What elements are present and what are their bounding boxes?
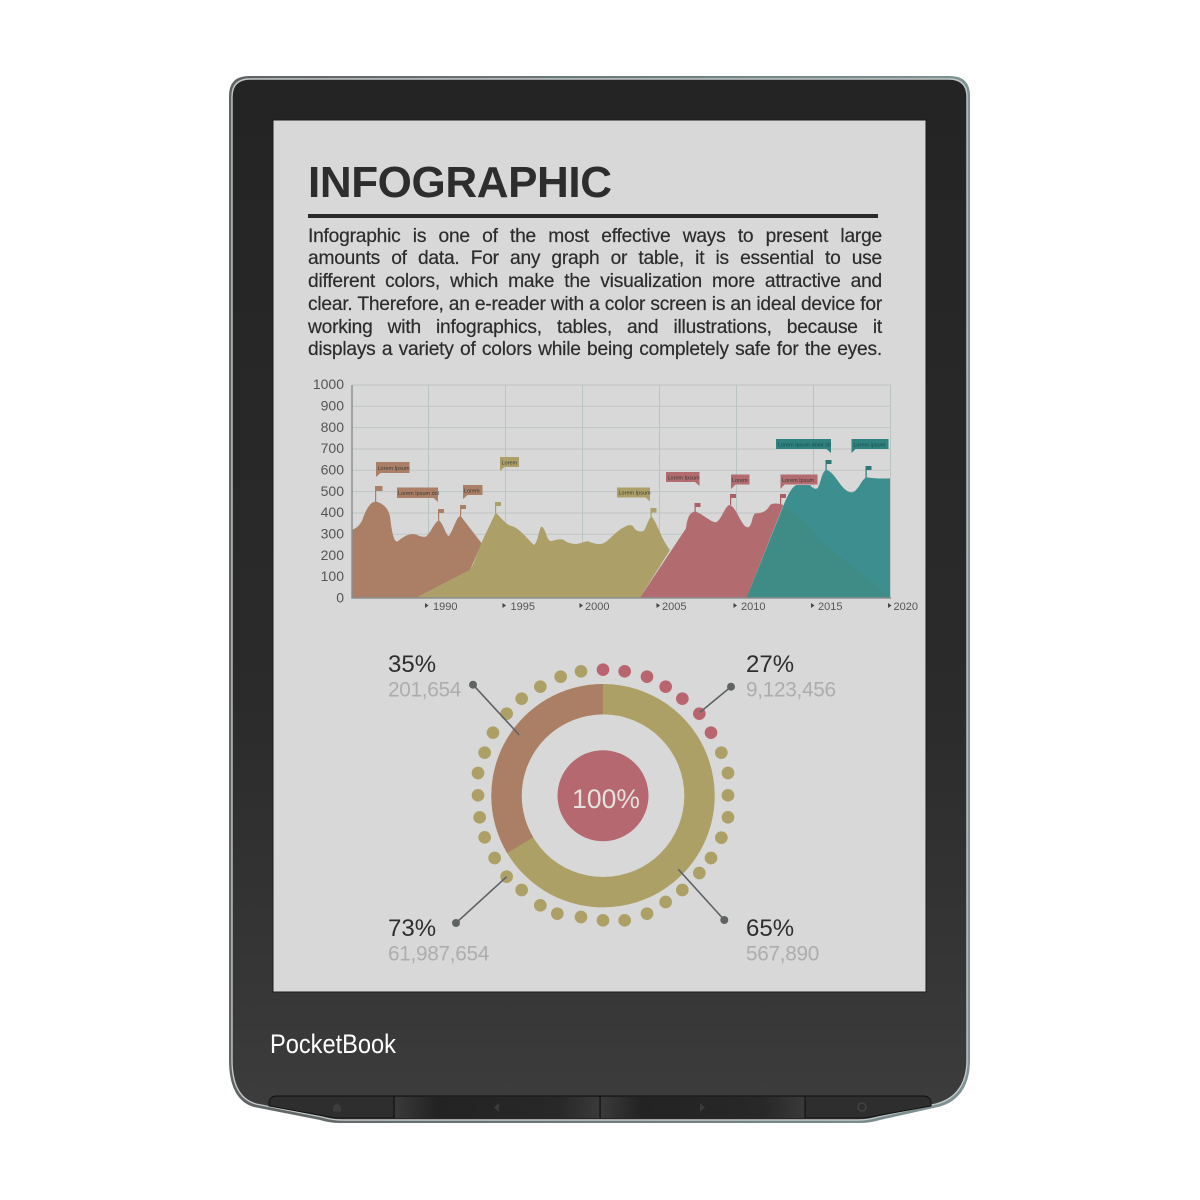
callout: brown 3 [463, 485, 482, 499]
callout: red 3: Lorem Ipsum [782, 478, 815, 484]
callout: brown 2: Lorem Ipsum dol [398, 491, 439, 497]
y axis labels: 0 [336, 590, 344, 606]
center circle [558, 750, 648, 841]
title rule [308, 214, 878, 218]
callout: olive 1: Lorem [502, 460, 518, 466]
donut ring: olive [506, 699, 700, 892]
y axis labels: 1000 [313, 376, 344, 392]
intro paragraph: working with infographics, tables, and illustrations, because it [308, 317, 882, 338]
callout: teal 1: Lorem Ipsum dolor sit [778, 442, 831, 448]
intro paragraph: different colors, which make the visualization more attractive and [308, 271, 882, 292]
device outer rim [229, 76, 970, 1123]
intro paragraph: Infographic is one of the most effective ways to present large [308, 226, 882, 246]
button bar [269, 1096, 931, 1118]
y axis labels: 100 [321, 568, 344, 584]
callout: brown 1 [376, 462, 410, 477]
stat: 73%: 73% [388, 915, 436, 942]
callout: teal 2 [852, 439, 888, 453]
stat: 35%: 35% [388, 651, 436, 678]
stat: 65% [746, 915, 819, 966]
leader: bottom left [452, 877, 507, 927]
stat: 73%: 61,987,654 [388, 942, 489, 966]
callout: red 1: Lorem Ipsum [668, 476, 700, 482]
callout: red 3 [780, 474, 818, 489]
area: olive series [417, 513, 670, 598]
leader lines [452, 681, 735, 927]
center label: 100% [572, 784, 640, 814]
y axis labels: 800 [321, 419, 344, 435]
stat: 65%: 567,890 [746, 942, 819, 966]
stat: 35%: 201,654 [388, 678, 461, 702]
brand logo: PocketBook [270, 1029, 396, 1059]
callout: teal 1 [776, 439, 831, 453]
x axis labels: 2020 [894, 601, 918, 613]
stat: 73% [388, 915, 489, 966]
y axis labels: 700 [321, 440, 344, 456]
leader: top left [469, 681, 519, 735]
x axis labels: 2010 [741, 601, 765, 613]
callout: brown 1: Lorem Ipsum [378, 466, 410, 472]
x axis labels: 2015 [818, 601, 842, 613]
callout: red 2 [731, 474, 750, 489]
button icon: power [858, 1103, 866, 1111]
button icon: forward [700, 1103, 705, 1112]
stat: 27%: 27% [746, 651, 794, 678]
area: teal overlap [747, 507, 890, 598]
callout: olive 2: Lorem Ipsum [618, 490, 651, 496]
olive dots [472, 665, 734, 927]
intro paragraph: amounts of data. For any graph or table, it is essential to use [308, 248, 882, 269]
x axis labels: 2000 [585, 601, 609, 613]
callout: red 2: Lorem [732, 478, 748, 484]
device body [232, 79, 967, 1120]
leader: bottom right [678, 869, 728, 924]
x axis labels: 2005 [662, 601, 686, 613]
x axis labels: 1990 [433, 601, 457, 613]
intro paragraph: displays a variety of colors while being completely safe for the eyes. [308, 339, 882, 360]
button icon: back [494, 1103, 499, 1112]
callout: olive 1 [500, 457, 519, 471]
intro paragraph: clear. Therefore, an e-reader with a color screen is an ideal device for [308, 294, 882, 315]
y axis labels: 900 [321, 398, 344, 414]
callouts [376, 439, 888, 502]
area: brown series [352, 502, 482, 598]
callout: brown 2 [397, 488, 439, 502]
flags [375, 460, 872, 521]
leader: top right [700, 683, 735, 712]
y axis labels: 600 [321, 462, 344, 478]
x axis labels: 1995 [510, 601, 535, 613]
red dots [597, 663, 717, 739]
chart grid [352, 385, 891, 598]
stat: 35% [388, 651, 461, 702]
dot ring [472, 663, 734, 927]
screen [273, 120, 926, 992]
title: INFOGRAPHIC [308, 158, 612, 207]
callout: teal 2: Lorem ipsum [854, 442, 886, 448]
callout: brown 3: Lorem [464, 488, 480, 494]
stat: 27%: 9,123,456 [746, 678, 836, 702]
data areas [352, 502, 670, 598]
y axis labels: 200 [321, 547, 344, 563]
y axis labels: 500 [321, 483, 344, 499]
area: red series [640, 503, 783, 598]
callout: red 1 [666, 472, 700, 486]
stat: 27% [746, 651, 836, 702]
y axis labels [313, 376, 344, 606]
x axis labels [425, 601, 918, 613]
donut arc: brown [491, 684, 603, 853]
button icon: home [333, 1103, 341, 1112]
axes [352, 385, 891, 598]
callout: olive 2 [617, 488, 651, 502]
intro paragraph [308, 226, 882, 360]
area: teal series [747, 470, 890, 598]
stat: 65%: 65% [746, 915, 794, 942]
y axis labels: 400 [321, 504, 344, 520]
y axis labels: 300 [321, 526, 344, 542]
